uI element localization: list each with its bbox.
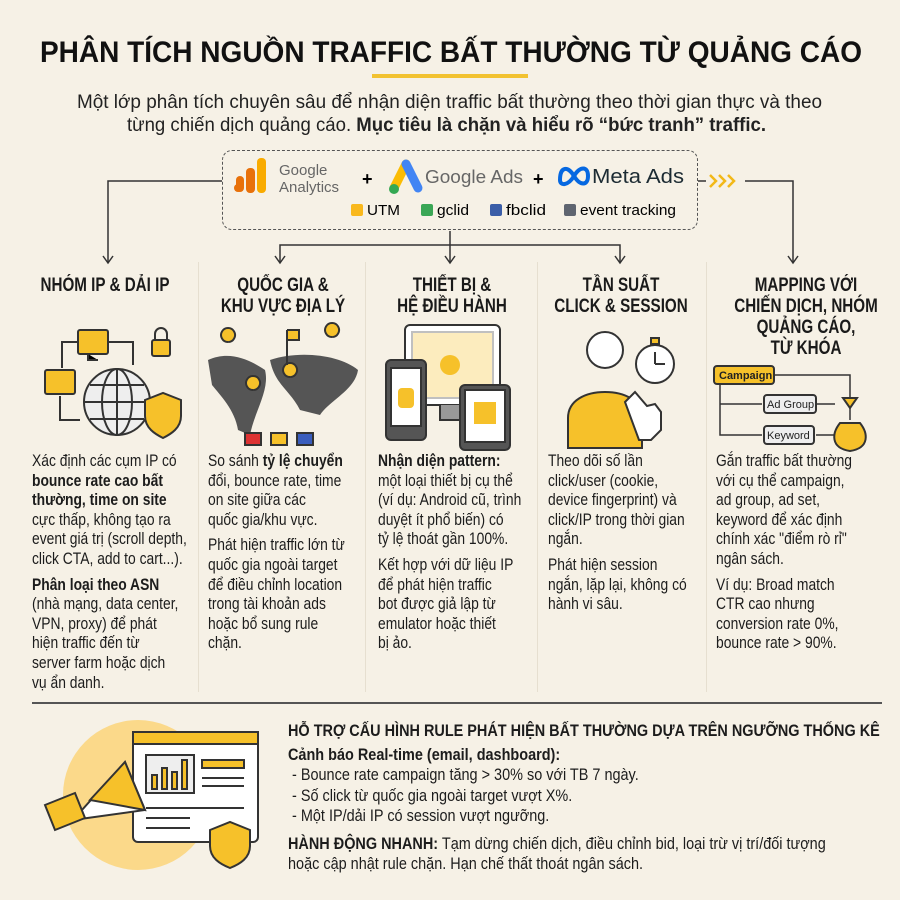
text: col2: đổi, bounce rate, time xyxy=(208,472,341,490)
heading: col5: MAPPING VỚI xyxy=(755,275,857,296)
text: col5: ngân sách. xyxy=(716,550,784,568)
text: col4: ngắn. xyxy=(548,530,583,548)
heading: col3: THIẾT BỊ & xyxy=(413,275,491,296)
text: col4: Phát hiện session xyxy=(548,556,657,574)
sources box: fbclid xyxy=(506,202,546,219)
text: bottom rule section xyxy=(288,721,880,873)
text: col1 xyxy=(32,452,187,692)
sources box xyxy=(222,150,698,230)
text: col5: CTR cao nhưng xyxy=(716,595,815,613)
text: col3: emulator hoặc thiết xyxy=(378,615,496,633)
icon: campaign mapping: Ad Group xyxy=(767,399,814,411)
heading: col4: TẦN SUẤT xyxy=(583,275,659,296)
title: PHÂN TÍCH NGUỒN TRAFFIC BẤT THƯỜNG TỪ QUẢNG CÁO xyxy=(40,35,862,69)
title: từng chiến dịch quảng cáo. Mục tiêu là chặn và hiểu rõ “bức tranh” traffic. xyxy=(127,115,766,136)
text: col2: chặn. xyxy=(208,634,242,652)
text: col1: Phân loại theo ASN xyxy=(32,576,159,594)
text: col1: VPN, proxy) để phát xyxy=(32,615,157,633)
heading: col4 xyxy=(554,274,688,317)
text: col5: bounce rate > 90%. xyxy=(716,634,837,652)
text: col4: device fingerprint) và xyxy=(548,491,677,509)
heading: col5: QUẢNG CÁO, xyxy=(757,317,855,338)
sources box: event tracking xyxy=(580,202,676,219)
text: col4 xyxy=(548,452,687,613)
heading: col3 xyxy=(397,274,507,317)
sources box: UTM xyxy=(367,202,400,219)
text: col1: bounce rate cao bất xyxy=(32,472,163,490)
text: col4: Theo dõi số lần xyxy=(548,452,643,470)
text: col2 xyxy=(208,452,345,652)
text: col5: với cụ thể campaign, xyxy=(716,472,845,490)
heading: col5: CHIẾN DỊCH, NHÓM xyxy=(734,296,878,317)
text: col3: Nhận diện pattern: xyxy=(378,452,500,470)
icon: campaign mapping: Campaign xyxy=(719,370,772,382)
text: col3: tỷ lệ thoát gần 100%. xyxy=(378,530,508,548)
text: col1: server farm hoặc dịch xyxy=(32,654,165,672)
text: col2: on site giữa các xyxy=(208,491,306,509)
icon: IP network xyxy=(45,328,181,438)
text: col3: Kết hợp với dữ liệu IP xyxy=(378,556,513,574)
text: col2: hoặc bổ sung rule xyxy=(208,615,318,633)
text: bottom rule section: hoặc cập nhật rule chặn. Hạn chế thất thoát ngân sách. xyxy=(288,854,643,873)
text: col3 xyxy=(378,452,521,652)
sources box: Meta Ads xyxy=(592,166,684,188)
text: col1: (nhà mạng, data center, xyxy=(32,595,178,613)
heading: col4: CLICK & SESSION xyxy=(554,296,688,317)
icon: google ads xyxy=(389,164,418,194)
text: col3: bị ảo. xyxy=(378,634,412,652)
text: col1: event giá trị (scroll depth, xyxy=(32,530,187,548)
text: col5: conversion rate 0%, xyxy=(716,615,838,633)
text: bottom rule section: - Một IP/dải IP có session vượt ngưỡng. xyxy=(292,806,549,825)
text: col2: quốc gia/khu vực. xyxy=(208,511,317,529)
text: bottom rule section: HỖ TRỢ CẤU HÌNH RULE PHÁT HIỆN BẤT THƯỜNG DỰA TRÊN NGƯỠNG THỐNG KÊ xyxy=(288,721,880,740)
sources box: gclid xyxy=(437,202,469,219)
title: Một lớp phân tích chuyên sâu để nhận diện traffic bất thường theo thời gian thực và theo xyxy=(77,92,822,113)
text: col3: bot được giả lập từ xyxy=(378,595,496,613)
icon: google analytics xyxy=(234,158,266,193)
icon: campaign mapping xyxy=(714,366,866,451)
text: col3: (ví dụ: Android cũ, trình xyxy=(378,491,521,509)
text: col3: một loại thiết bị cụ thể xyxy=(378,472,513,490)
sources box: Analytics xyxy=(279,179,339,196)
text: col5: keyword để xác định xyxy=(716,511,842,529)
sources box: Google Ads xyxy=(425,167,523,187)
heading: col1: NHÓM IP & DẢI IP xyxy=(41,275,169,296)
icon: megaphone & dashboard xyxy=(44,720,259,870)
text: col2: để điều chỉnh location xyxy=(208,576,342,594)
arrows: connectors xyxy=(102,174,798,264)
text: col4: click/user (cookie, xyxy=(548,472,658,490)
sources box: + xyxy=(533,169,544,189)
text: bottom rule section: - Bounce rate campaign tăng > 30% so với TB 7 ngày. xyxy=(292,765,639,784)
text: col5: Gắn traffic bất thường xyxy=(716,452,852,470)
icon: meta xyxy=(560,168,588,184)
text: col5: chính xác "điểm rò rỉ" xyxy=(716,530,847,548)
text: col2: trong tài khoản ads xyxy=(208,595,326,613)
text: col1: vụ ẩn danh. xyxy=(32,674,104,692)
text: col4: click/IP trong thời gian xyxy=(548,511,685,529)
title xyxy=(40,35,862,136)
heading: col3: HỆ ĐIỀU HÀNH xyxy=(397,296,507,317)
heading: col2 xyxy=(221,274,345,317)
text: col3: duyệt ít phổ biến) có xyxy=(378,511,504,529)
text: col5 xyxy=(716,451,852,652)
text: col1: Xác định các cụm IP có xyxy=(32,452,177,470)
text: col1: cực thấp, không tạo ra xyxy=(32,511,171,529)
text: col5: ad group, ad set, xyxy=(716,491,820,509)
text: bottom rule section: HÀNH ĐỘNG NHANH: Tạm dừng chiến dịch, điều chỉnh bid, loại trừ vị trí/đối tượng xyxy=(288,834,826,852)
heading: col5 xyxy=(734,274,878,359)
icon: campaign mapping: Keyword xyxy=(767,430,810,442)
icon: user clicking & stopwatch xyxy=(568,332,674,448)
text: col2: quốc gia ngoài target xyxy=(208,556,337,574)
icon: devices xyxy=(386,325,510,450)
text: col1: hiện traffic đến từ xyxy=(32,634,140,652)
text: col1: click CTA, add to cart...). xyxy=(32,550,183,568)
text: col1: thường, time on site xyxy=(32,491,167,509)
text: bottom rule section: Cảnh báo Real-time (email, dashboard): xyxy=(288,744,560,764)
sources box: + xyxy=(362,169,373,189)
text: col2: Phát hiện traffic lớn từ xyxy=(208,536,345,554)
heading: col2: KHU VỰC ĐỊA LÝ xyxy=(221,296,345,317)
text: col3: để phát hiện traffic xyxy=(378,576,492,594)
icon: world map xyxy=(208,323,358,445)
text: col4: hành vi sâu. xyxy=(548,595,623,613)
icons xyxy=(44,322,867,452)
heading: col5: TỪ KHÓA xyxy=(771,338,841,359)
text: col4: ngắn, lặp lại, không có xyxy=(548,576,687,594)
text: bottom rule section: - Số click từ quốc gia ngoài target vượt X%. xyxy=(292,786,572,804)
sources box: Google xyxy=(279,162,327,179)
text: col2: So sánh tỷ lệ chuyển xyxy=(208,452,343,470)
tags xyxy=(351,204,363,216)
text: col5: Ví dụ: Broad match xyxy=(716,576,835,594)
heading: col2: QUỐC GIA & xyxy=(237,275,329,296)
